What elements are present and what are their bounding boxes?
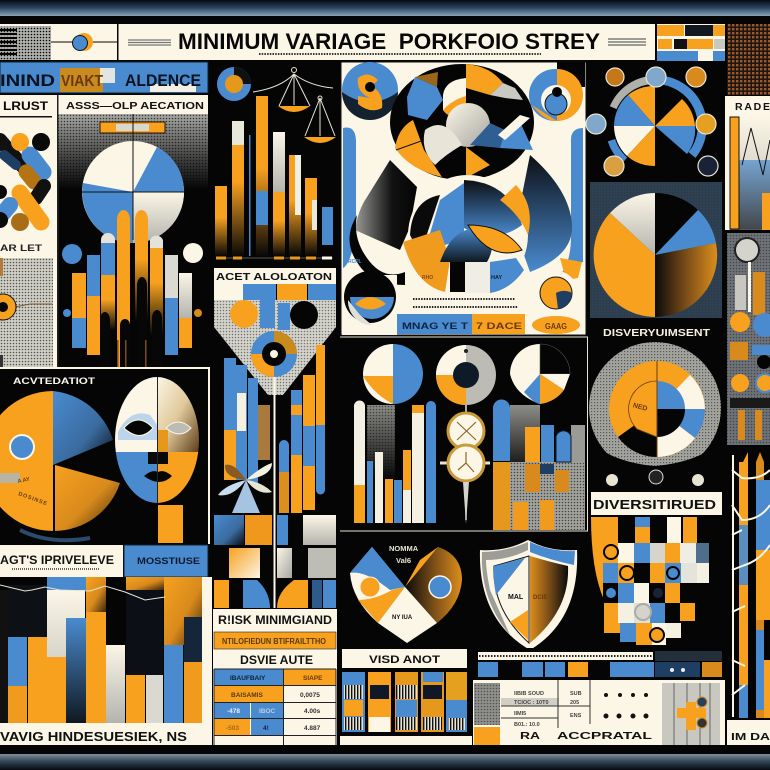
panel: heart pie [341,533,467,648]
mini table: B01.: 10.0 [514,722,540,728]
data table: 4! [263,725,269,732]
data table: IBAUFBAIY [230,675,266,682]
header emblem [0,24,118,60]
mini card four [421,672,444,732]
mini table: IIMI5 [514,711,526,717]
heading [58,95,208,114]
far right: radar chart [725,116,770,230]
heading: risk: R!ISK MINIMGIAND [218,615,332,627]
pie chart [82,114,184,243]
large pie [0,391,120,540]
subheading: DSVIE AUTE [240,653,313,667]
checker dots [604,545,679,642]
panel: big pie chart [590,182,722,318]
far right: radar heading: RADE [735,101,770,113]
mini table: TCIOC : 10T0 [514,700,549,706]
label: diversified [591,492,722,515]
far right: ladder bars [728,447,770,719]
caption row [0,545,208,577]
shield label: MAL [508,594,524,601]
panel: risk table: NTILOFIEDUN BTIFRAILTTHO [222,637,326,646]
panel: left trust column [0,95,57,367]
panel: asset allocation pie and bars: ASSS—OLP AECATION [66,101,204,112]
checker row two [229,548,336,578]
brown tile pattern corner [727,24,770,95]
panel: risk table [213,609,337,745]
circle two [436,345,496,405]
title: MINIMUM VARIAGE PORKFOIO STREY [178,29,600,54]
caption: RA [520,730,541,742]
mini card three [395,672,418,732]
mini cards row [340,672,472,745]
heading: ACVTEDATIOT [13,376,96,386]
blue banner: VIAKT [61,73,103,90]
ring [614,80,655,108]
heading: diversification: DISVERYUIMSENT [603,328,710,339]
caption row: MOSSTIUSE [137,556,200,566]
dot grid [604,693,648,718]
data table [214,669,336,745]
marker dots [62,243,203,317]
thin bars [354,400,436,523]
ring sectors: NED [632,402,648,413]
ring sectors [609,361,705,457]
lower left ball: RCPL [348,259,362,265]
mini card two [368,672,391,732]
data table: SIAPE [303,675,323,682]
panel: asset allocation pie and bars [57,95,208,367]
panel: radial gauge pie [586,62,722,178]
heart labels: NOMMA [389,544,419,553]
mini card five [446,672,467,732]
top left ball [342,62,398,120]
panel: balance scales and bars [212,62,337,268]
panel: central overlapping circles [341,62,586,335]
halftone shadows [367,405,395,480]
panel: heart pie: NY IUA [392,615,413,621]
blue banner: ALDENCE [125,71,201,90]
lower lobe [403,175,530,295]
label: diversified: DIVERSITIRUED [593,497,716,512]
checker row one [214,515,336,545]
caption blocks: MNAG YE T [402,321,468,332]
side strips [343,128,583,275]
coin stack [440,405,490,524]
icon: globe [217,67,251,101]
mini table [501,680,590,728]
data table: BAISAMIS [231,692,263,699]
pie sectors [613,84,697,168]
panel: allocation with funnel: ACET ALOLOATON [216,272,332,283]
data table: 4.887 [304,725,321,732]
data table: 4.00s [304,708,321,715]
caption blocks: GAAG [545,322,567,331]
mask face [115,377,200,543]
small line chart [0,258,53,367]
halftone ground with circles [214,300,336,395]
data table: -503 [226,725,239,732]
mini table: IIBIB SOUD [514,691,544,697]
bar chart [72,210,192,367]
icon: balance scales [253,68,336,143]
data table: IBOC [259,708,276,715]
large pie: A AY [17,476,31,485]
caption: heart panel [342,649,467,668]
coins [586,67,718,176]
blue tag [124,545,208,577]
top right ball [529,62,585,121]
far right: radar heading [725,96,770,116]
panel: accrual table [473,680,725,745]
right icon stripes [662,683,720,745]
panel: heart pie: Val6 [396,556,411,565]
data table: 0,0075 [300,692,320,699]
large pie: DOSINSE [17,491,48,507]
caption: ACCPRATAL [557,730,653,742]
icon: central target [251,331,297,377]
top decorative band [0,0,770,16]
lower lobe: HAY [491,275,502,281]
header strip with title [0,24,655,60]
header colour blocks [657,24,725,61]
data table: -478 [227,708,240,715]
lower right ball [534,258,582,315]
far right: caption: IM DA [731,731,770,743]
panel: circles with bars [340,337,588,531]
far right: caption [727,720,770,745]
caption: heart panel: VISD ANOT [369,654,440,666]
blue banner [0,62,208,93]
icon: fan [218,463,272,513]
caption blocks [397,314,580,334]
colour header row [214,284,336,300]
caption row: AGT'S IPRIVELEVE [0,553,114,567]
upper lobe [390,64,534,180]
blue banner: ININD [0,71,55,90]
left swoosh [355,160,417,250]
trend line [0,585,165,600]
caption blocks: 7 DACE [476,321,522,332]
panel: stacked bar chart [0,577,212,745]
shield [480,540,577,650]
circle one [363,344,423,404]
heading: trust: LRUST [3,99,49,113]
lower left ball [342,259,397,335]
right columns [493,400,571,530]
mini table: ENS [570,713,582,719]
orange subhead [214,632,336,649]
bar chart [215,96,333,258]
panel: allocation with funnel [214,268,336,395]
panel: checker shield [590,517,722,648]
panel: shield [472,533,587,650]
mini table: 205 [570,700,579,706]
far right: mechanism panel [727,233,770,445]
strip: dotted legend and colour band [472,648,722,678]
panel: stacked columns and checkers [214,330,337,608]
right swoosh [515,155,572,272]
mini table: SUB [570,691,582,697]
icon: interlaced capsules [0,140,44,222]
panel: diversification ring [589,340,722,492]
checker row three [214,580,336,608]
panel: shield: DCIE [533,595,547,601]
label: AR LET [0,243,43,253]
small dots [606,470,704,486]
legend bar [100,122,165,133]
dotted text rows [413,299,518,307]
circle three [510,344,570,404]
mini card one [342,672,365,732]
panel: attestation pie and face [0,367,210,544]
caption [520,730,653,742]
axis caption: VAVIG HINDESUESIEK, NS [0,729,187,744]
label [214,268,336,284]
lower lobe: RHO [422,275,433,281]
bottom decorative band [0,754,770,770]
